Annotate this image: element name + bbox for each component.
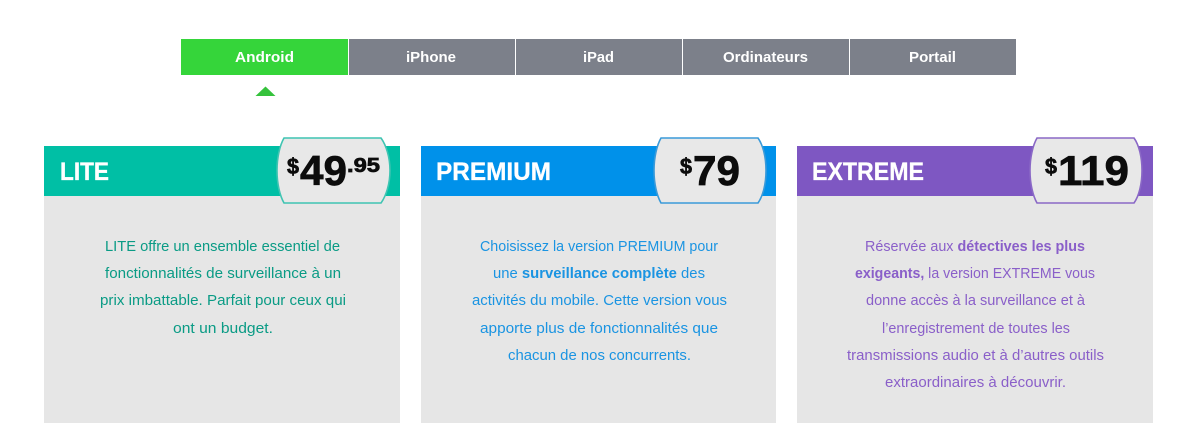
panel body: [797, 196, 1153, 423]
tab: Ordinateurs: Ordinateurs: [723, 49, 808, 66]
price badge: [277, 138, 390, 203]
description: donne accès à la surveillance et à: [866, 292, 1086, 309]
description: [472, 238, 727, 364]
header band: [421, 146, 776, 196]
description: Réservée aux détectives les plus: [865, 238, 1085, 255]
description: [100, 238, 346, 337]
tab: iPad: [516, 39, 682, 75]
price badge: $: [1045, 154, 1057, 179]
description: apporte plus de fonctionnalités que: [480, 320, 718, 337]
description: activités du mobile. Cette version vous: [472, 292, 727, 309]
tab: Android: Android: [235, 49, 294, 66]
price badge: 119: [1058, 147, 1129, 194]
price badge: 49: [300, 147, 347, 194]
description: l’enregistrement de toutes les: [882, 320, 1070, 337]
description: fonctionnalités de surveillance à un: [105, 265, 341, 282]
price badge: [654, 138, 766, 203]
tab: iPhone: iPhone: [406, 49, 456, 66]
description: extraordinaires à découvrir.: [885, 374, 1066, 391]
header band: [797, 146, 1153, 196]
description: ont un budget.: [173, 320, 273, 337]
price badge: $: [287, 154, 299, 179]
description: chacun de nos concurrents.: [508, 347, 691, 364]
price badge: $: [680, 154, 692, 179]
heading: PREMIUM: [436, 158, 551, 186]
tab: Portail: Portail: [909, 49, 956, 66]
price badge: [1030, 138, 1142, 203]
navigation tabs: [181, 39, 1016, 75]
heading: LITE: [60, 158, 109, 186]
tab: iPad: iPad: [583, 49, 614, 66]
price badge: 79: [693, 147, 740, 194]
icon: active tab arrow: [256, 86, 276, 96]
panel: LITE: [44, 138, 400, 423]
tab: iPhone: [349, 39, 515, 75]
description: prix imbattable. Parfait pour ceux qui: [100, 292, 346, 309]
tab: Android: [181, 39, 348, 75]
heading: EXTREME: [812, 158, 924, 186]
panel: PREMIUM: [421, 138, 776, 423]
description: Choisissez la version PREMIUM pour: [480, 238, 718, 255]
description: exigeants, la version EXTREME vous: [855, 265, 1095, 282]
panel body: [44, 196, 400, 423]
price badge: .95: [347, 155, 380, 177]
panel body: [421, 196, 776, 423]
tab: Ordinateurs: [683, 39, 849, 75]
description: LITE offre un ensemble essentiel de: [105, 238, 340, 255]
description: [847, 238, 1104, 391]
description: une surveillance complète des: [493, 265, 705, 282]
header band: [44, 146, 400, 196]
panel: EXTREME: [797, 138, 1153, 423]
description: transmissions audio et à d’autres outils: [847, 347, 1104, 364]
tab: Portail: [850, 39, 1016, 75]
